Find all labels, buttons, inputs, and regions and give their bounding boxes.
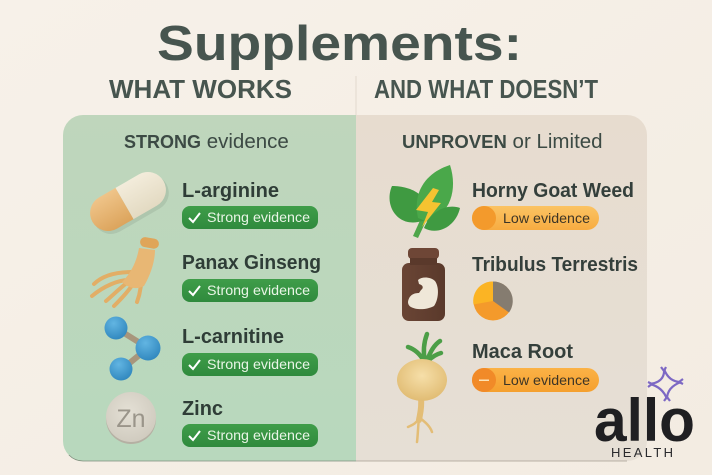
label: Maca Root: Maca Root [472,341,573,363]
badge: low evidence [472,368,599,392]
badge: strong evidence: Strong evidence [207,427,310,443]
panel: strong evidence [63,115,356,461]
chart: evidence pie [473,281,513,320]
heading: and what doesn't: AND WHAT DOESN’T [374,74,598,104]
heading: what works: WHAT WORKS [109,74,292,104]
label: Panax Ginseng: Panax Ginseng [182,252,321,274]
icon: molecule [104,316,160,380]
logo: allo health [594,367,695,460]
logo mark: purple star [648,367,683,401]
badge: low evidence: Low evidence [503,372,590,388]
badge: strong evidence [182,206,318,229]
badge: low evidence: Low evidence [503,210,590,226]
label: Tribulus Terrestris: Tribulus Terrestris [472,254,638,276]
icon: ginseng root [92,236,160,306]
panel heading: strong evidence: STRONG evidence [124,130,289,153]
logo wordmark: allo [594,387,695,454]
logo subtitle: HEALTH [611,445,673,460]
badge: strong evidence: Strong evidence [207,209,310,225]
label: L-arginine: L-arginine [182,180,279,202]
panel heading: unproven or limited: UNPROVEN or Limited [402,130,603,153]
icon: leaves with lightning [390,165,460,238]
badge: strong evidence: Strong evidence [207,356,310,372]
icon: supplement jar [402,248,445,321]
badge: strong evidence [182,279,318,302]
icon: capsule [83,165,175,241]
badge: low evidence [472,206,599,230]
badge: strong evidence [182,353,318,376]
label: L-carnitine: L-carnitine [182,326,284,348]
icon: zinc tablet [106,392,156,444]
label: Zinc: Zinc [182,398,223,420]
badge: strong evidence [182,424,318,447]
title: Supplements: [157,17,522,71]
icon: maca root [397,334,447,442]
panel: unproven or limited [356,115,647,461]
icon: zinc tablet: Zn [116,405,146,433]
badge: strong evidence: Strong evidence [207,282,310,298]
label: Horny Goat Weed: Horny Goat Weed [472,180,634,202]
